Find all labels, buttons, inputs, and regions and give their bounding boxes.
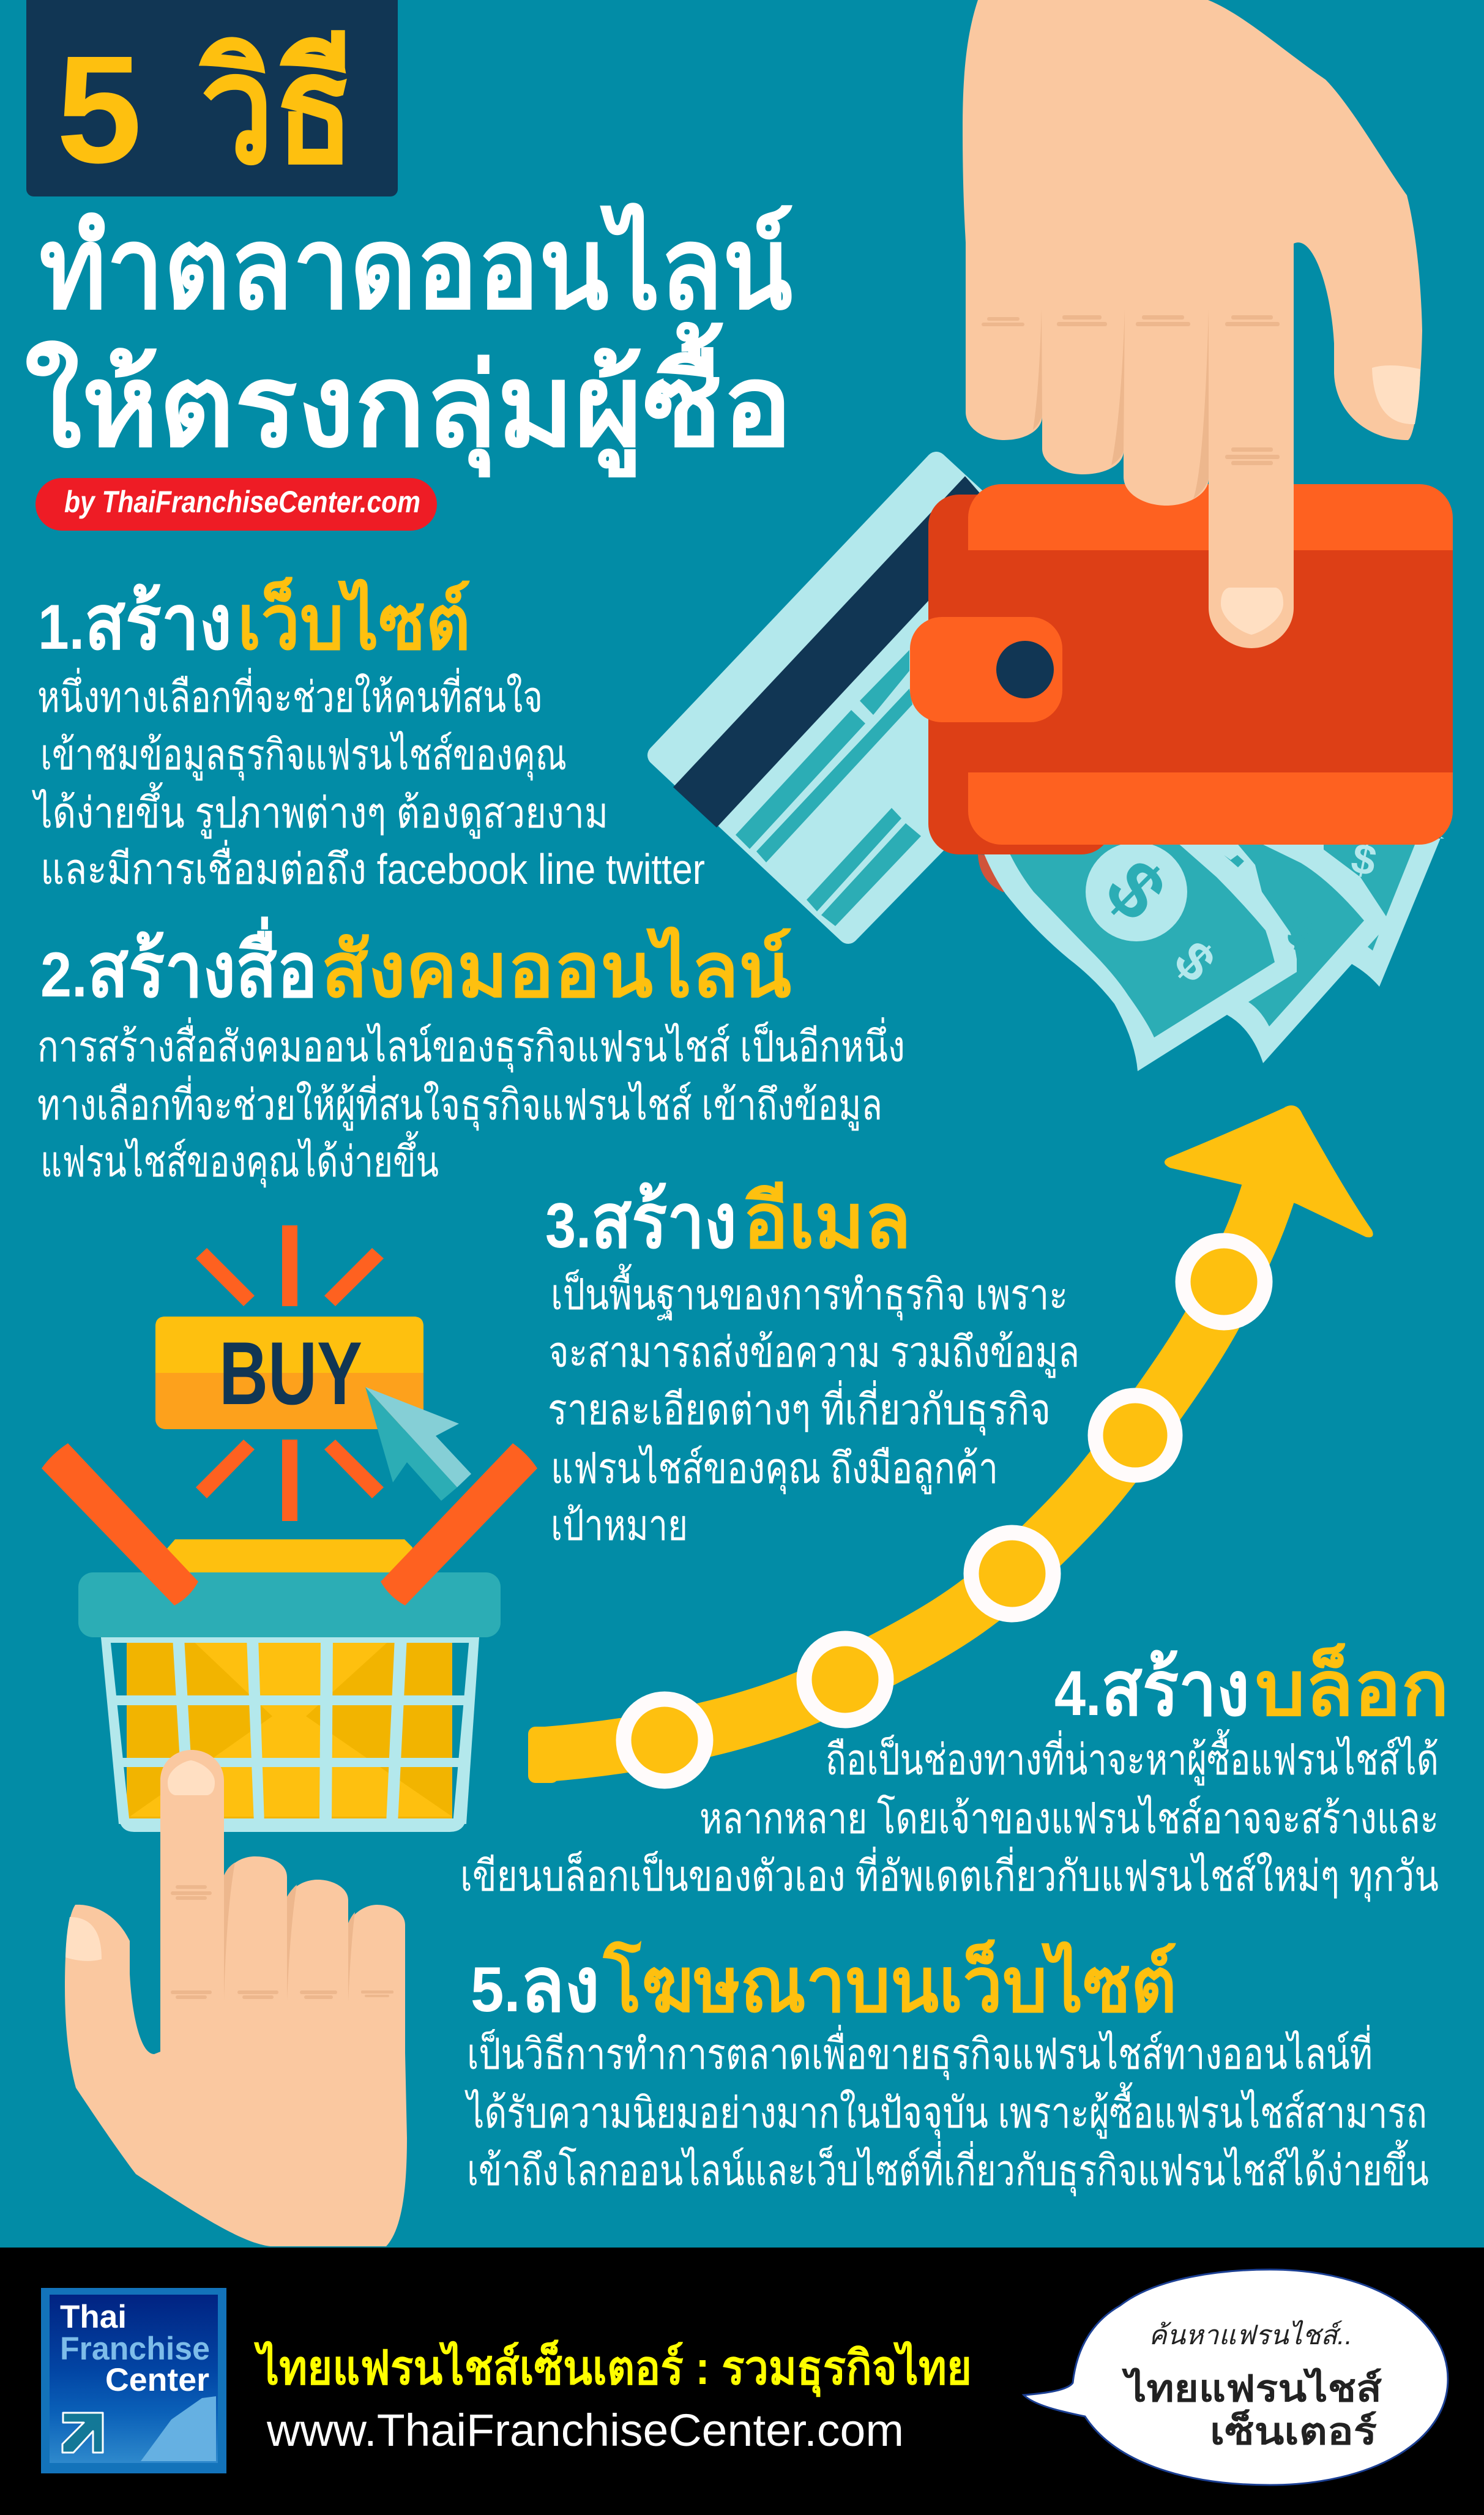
section 4 heading xyxy=(1054,1642,1449,1732)
footer website url: www.ThaiFranchiseCenter.com xyxy=(266,2405,904,2456)
illustration: money bills: $ xyxy=(1163,929,1227,993)
main title: ให้ตรงกลุ่มผู้ซื้อ xyxy=(24,321,792,477)
footer logo: Thai xyxy=(60,2299,127,2335)
illustration: money bills xyxy=(976,832,1444,1071)
footer logo xyxy=(41,2288,226,2473)
section 2 text xyxy=(37,1017,905,1188)
section 3 text: จะสามารถส่งข้อความ รวมถึงข้อมูล xyxy=(548,1328,1079,1378)
main title: ทำตลาดออนไลน์ xyxy=(39,203,792,332)
fingernail xyxy=(1221,588,1283,635)
section 3 text xyxy=(548,1263,1079,1549)
section 3 text: เป็นพื้นฐานของการทำธุรกิจ เพราะ xyxy=(551,1263,1068,1321)
section 5 text xyxy=(464,2025,1429,2197)
byline pill: by ThaiFranchiseCenter.com xyxy=(64,485,420,519)
section 2 heading: สังคมออนไลน์ xyxy=(321,927,791,1013)
speech bubble: ไทยแฟรนไชส์ xyxy=(1121,2367,1382,2409)
buy button xyxy=(155,1317,423,1429)
section 1 text xyxy=(32,668,705,893)
cursor arrow icon xyxy=(365,1387,471,1501)
wallet clasp xyxy=(910,617,1062,722)
section 4 heading: 4.สร้าง xyxy=(1054,1646,1250,1732)
thumbnail xyxy=(65,1917,102,1961)
section 2 text: ทางเลือกที่จะช่วยให้ผู้ที่สนใจธุรกิจแฟรนไชส์ เข้าถึงข้อมูล xyxy=(37,1075,882,1131)
section 1 text: ได้ง่ายขึ้น รูปภาพต่างๆ ต้องดูสวยงาม xyxy=(32,782,608,839)
basket contents xyxy=(127,1637,452,1818)
section 5 heading: 5.ลง xyxy=(471,1943,600,2028)
section 1 text: และมีการเชื่อมต่อถึง facebook line twitter xyxy=(40,840,705,893)
section 4 text xyxy=(460,1728,1439,1902)
section 4 heading: บล็อก xyxy=(1255,1642,1449,1732)
basket rim xyxy=(78,1572,501,1637)
buy button: BUY xyxy=(219,1323,362,1423)
title badge: 5 ways: 5 xyxy=(56,24,142,195)
byline pill xyxy=(35,478,437,531)
speech bubble: เซ็นเตอร์ xyxy=(1210,2409,1377,2452)
illustration: money bills: $ xyxy=(1348,834,1381,885)
title badge: 5 ways xyxy=(26,0,398,196)
fingernail xyxy=(168,1760,215,1795)
illustration: credit card xyxy=(658,462,1132,933)
speech bubble xyxy=(1024,2270,1448,2485)
section 1 heading xyxy=(38,576,471,665)
coin with dollar sign: $ xyxy=(1089,843,1183,937)
thumbnail xyxy=(1372,365,1420,424)
section 2 text: การสร้างสื่อสังคมออนไลน์ของธุรกิจแฟรนไชส์ เป็นอีกหนึ่ง xyxy=(37,1017,905,1073)
section 1 heading: เว็บไซต์ xyxy=(237,576,471,665)
main title xyxy=(24,203,792,477)
section 2 text: แฟรนไชส์ของคุณได้ง่ายขึ้น xyxy=(40,1130,439,1188)
illustration: wallet xyxy=(910,484,1453,854)
illustration: buy button rays xyxy=(196,1225,384,1521)
title badge: 5 ways: วิธี xyxy=(199,24,355,195)
speech bubble: ค้นหาแฟรนไชส์.. xyxy=(1149,2320,1352,2350)
basket wire frame xyxy=(101,1637,479,1832)
section 1 heading: 1.สร้าง xyxy=(38,580,232,665)
illustration: upper hand xyxy=(963,0,1422,648)
section 1 text: เข้าชมข้อมูลธุรกิจแฟรนไชส์ของคุณ xyxy=(40,731,567,781)
section 1 text: หนึ่งทางเลือกที่จะช่วยให้คนที่สนใจ xyxy=(37,668,543,721)
footer logo: Center xyxy=(105,2362,209,2398)
shopping basket xyxy=(42,1443,537,1832)
footer logo: Franchise xyxy=(60,2331,210,2367)
footer band xyxy=(0,2248,1484,2515)
section 3 text: แฟรนไชส์ของคุณ ถึงมือลูกค้า xyxy=(551,1444,998,1495)
section 3 text: เป้าหมาย xyxy=(551,1501,688,1549)
section 3 heading xyxy=(545,1179,911,1264)
illustration: money bills: $ xyxy=(1281,906,1320,959)
section 5 heading: โฆษณาบนเว็บไซต์ xyxy=(602,1938,1177,2028)
section 2 heading: 2.สร้างสื่อ xyxy=(40,916,318,1013)
growth arrow with milestone circles xyxy=(528,1105,1373,1783)
section 3 text: รายละเอียดต่างๆ ที่เกี่ยวกับธุรกิจ xyxy=(548,1380,1051,1436)
section 2 heading xyxy=(40,916,791,1013)
basket handles xyxy=(42,1443,537,1605)
section 3 heading: 3.สร้าง xyxy=(545,1179,737,1264)
section 3 heading: อีเมล xyxy=(743,1179,911,1264)
footer tagline: ไทยแฟรนไชส์เซ็นเตอร์ : รวมธุรกิจไทย xyxy=(254,2339,972,2397)
illustration: lower hand xyxy=(65,1750,407,2246)
